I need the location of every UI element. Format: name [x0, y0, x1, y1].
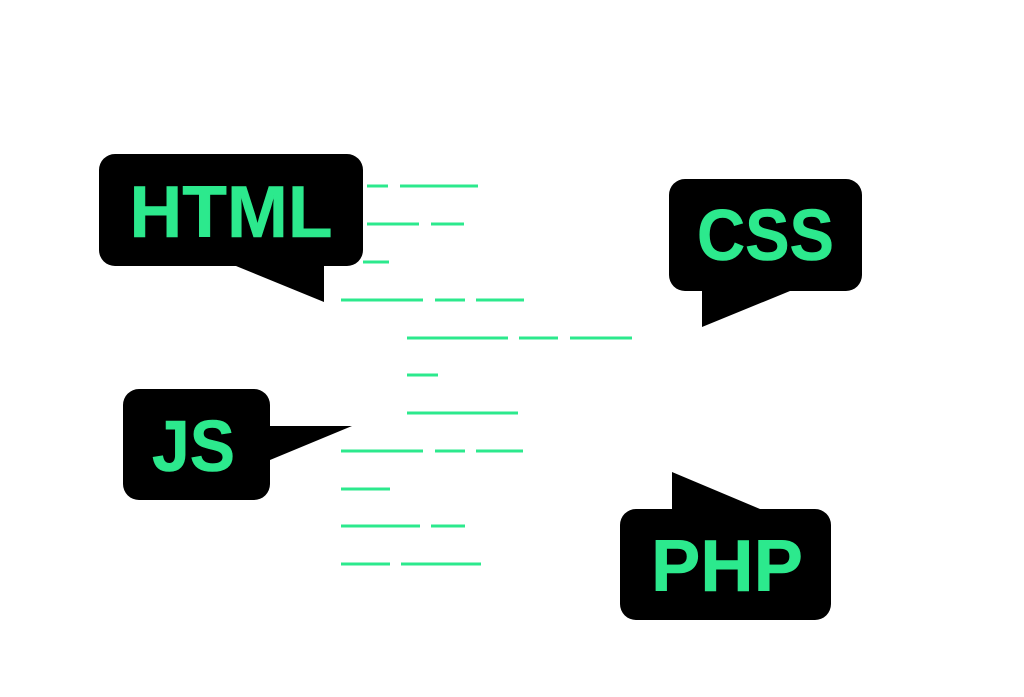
speech bubble: JS: [123, 389, 352, 500]
speech bubble: HTML: [99, 154, 363, 302]
speech bubble: CSS: CSS: [697, 196, 834, 276]
speech bubble: PHP: [620, 472, 831, 620]
speech bubble: JS: JS: [152, 407, 235, 487]
speech bubble: HTML: HTML: [130, 172, 332, 253]
speech bubble: PHP: PHP: [651, 526, 803, 607]
speech bubble: CSS: [669, 179, 862, 327]
code lines: [341, 186, 632, 564]
